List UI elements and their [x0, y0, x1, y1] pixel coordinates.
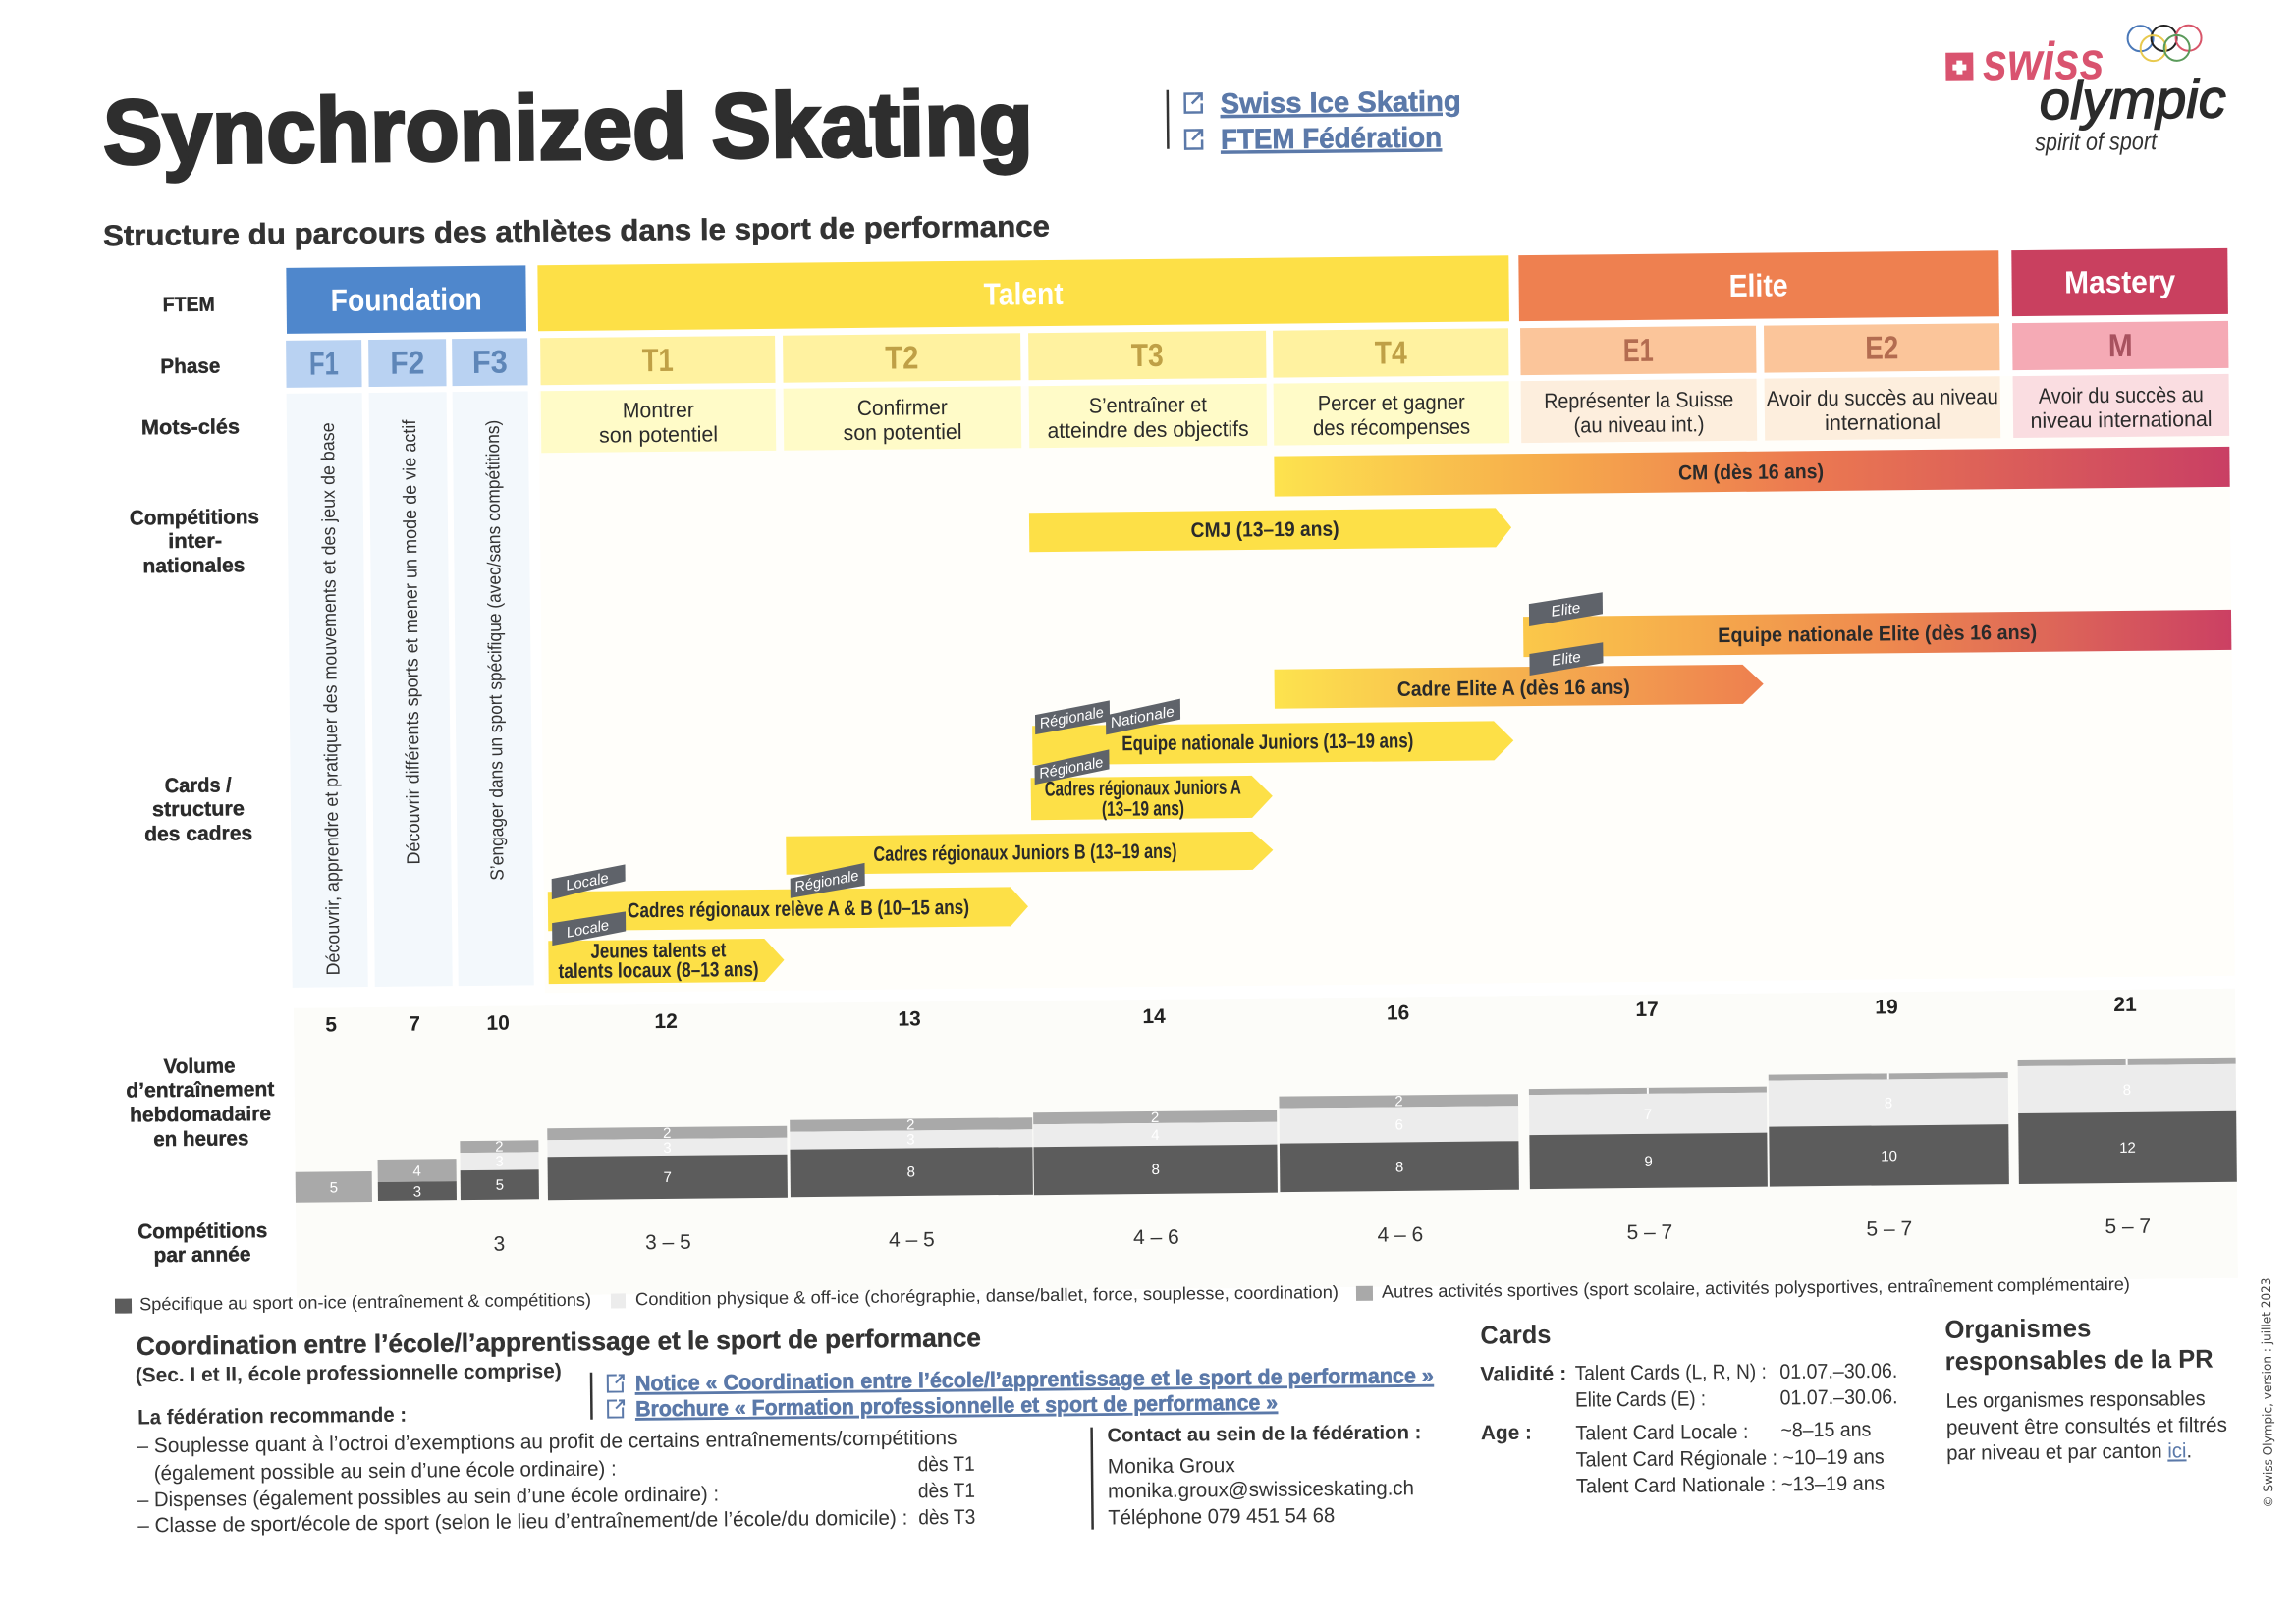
row labels: Cards / [165, 774, 232, 797]
subtitle: Structure du parcours des athlètes dans le sport de performance [103, 210, 1050, 252]
bar: E2: 10 [1881, 1148, 1897, 1164]
section: cards: Age : [1481, 1422, 1532, 1444]
keywords: Percer et gagner [1318, 390, 1465, 415]
keywords: des récompenses [1313, 414, 1470, 440]
arrow: Cadres régionaux Juniors A: (13–19 ans) [1102, 797, 1184, 821]
bar: T3 [1033, 1109, 1278, 1195]
section: responsible organisations: Organismes [1944, 1313, 2092, 1344]
icon: external link [608, 1400, 624, 1418]
bar: T4: 2 [1394, 1093, 1403, 1110]
section: responsible organisations: par niveau et par canton ici. [1946, 1439, 2192, 1465]
competitions per year: 4 – 6 [1133, 1226, 1179, 1249]
competitions per year: 4 – 5 [889, 1228, 935, 1252]
phases [286, 321, 2228, 388]
bar: F2 [378, 1159, 457, 1201]
competitions per year: 5 – 7 [1626, 1221, 1672, 1244]
competitions per year: 4 – 6 [1377, 1223, 1423, 1247]
arrow: CMJ: CMJ (13–19 ans) [1190, 518, 1339, 542]
section: cards: Talent Cards (L, R, N) : [1575, 1361, 1767, 1385]
recommendations list: – Classe de sport/école de sport (selon le lieu d’entraînement/de l’école/du domicile) : [137, 1507, 907, 1537]
recommendations list: – Souplesse quant à l’octroi d’exemptions au profit de certains entraînements/compétitions [137, 1427, 957, 1457]
totals: weekly hours: 12 [654, 1010, 678, 1033]
row labels: structure [152, 797, 245, 821]
row labels: Compétitions [130, 506, 259, 529]
recommendations list: dès T3 [918, 1506, 975, 1529]
keywords: (au niveau int.) [1573, 411, 1705, 438]
bar: T3: 8 [1151, 1162, 1160, 1178]
bar: T1: 3 [663, 1140, 672, 1157]
heading: Coordination entre l’école/l’apprentissage et le sport de performance [137, 1323, 981, 1361]
link: FTEM Fédération: FTEM Fédération [1221, 122, 1442, 156]
section: cards: Talent Card Régionale : ~10–19 ans [1576, 1445, 1885, 1472]
totals: weekly hours: 17 [1635, 999, 1659, 1021]
keywords: niveau international [2030, 406, 2213, 433]
section: cards: Validité : [1480, 1363, 1566, 1386]
header: Mastery [2011, 248, 2228, 316]
recommendations list: (également possible au sein d’une école ordinaire) : [154, 1458, 617, 1485]
bar: T3: 2 [1151, 1110, 1159, 1126]
totals: weekly hours: 19 [1875, 996, 1898, 1019]
arrow: Equipe nationale Juniors [1032, 721, 1513, 765]
keywords: international [1825, 409, 1941, 435]
keywords: Découvrir différents sports et mener un mode de vie actif [400, 419, 425, 865]
arrow: Cadres régionaux Juniors A: Cadres régionaux Juniors A [1045, 777, 1241, 801]
bar: Equipe nationale Elite [1523, 610, 2231, 657]
bar: CM: CM (dès 16 ans) [1678, 460, 1824, 485]
bar: E1: 9 [1644, 1154, 1653, 1170]
contact: monika.groux@swissiceskating.ch [1108, 1477, 1414, 1502]
FTEM headers [286, 248, 2228, 334]
row labels: d’entraînement [126, 1078, 274, 1103]
stacked bar chart: weekly training volume [295, 1058, 2237, 1203]
section: cards: Talent Card Locale : [1575, 1421, 1749, 1445]
header: Talent [537, 255, 1509, 331]
keywords: atteindre des objectifs [1047, 416, 1249, 443]
bar: T4: 8 [1395, 1159, 1403, 1175]
tag: Locale [552, 864, 626, 899]
keywords [287, 374, 2235, 988]
phases: M [2108, 327, 2133, 363]
competitions per year: 3 [493, 1233, 505, 1256]
phases: F1 [309, 345, 339, 382]
phases: T2 [885, 339, 918, 376]
bar: F3 [460, 1138, 539, 1200]
row labels [118, 293, 276, 1268]
bar: T2 [790, 1115, 1033, 1197]
row labels: Volume [163, 1055, 236, 1078]
logo: Swiss Olympic: swiss [1983, 31, 2105, 91]
bar: F3: 5 [496, 1177, 504, 1194]
bar: E1 [1529, 1087, 1768, 1189]
section: cards: 01.07.–30.06. [1779, 1360, 1897, 1383]
row labels: Compétitions [137, 1219, 267, 1243]
keywords: Représenter la Suisse [1544, 387, 1733, 413]
totals: weekly hours: 14 [1142, 1005, 1166, 1028]
section: school coordination: La fédération recommande : [137, 1404, 407, 1429]
totals: weekly hours [325, 994, 2137, 1036]
link: Notice: Notice « Coordination entre l’école/l’apprentissage et le sport de performance » [635, 1363, 1434, 1395]
section: school coordination [135, 1319, 1435, 1539]
arrow: Cadres régionaux relève [548, 887, 1028, 931]
bar: E2: 8 [1885, 1095, 1892, 1111]
tag: Locale [552, 911, 626, 946]
arrow: Cadres régionaux Juniors A [1031, 776, 1273, 822]
arrow: Cadres régionaux Juniors B: Cadres régionaux Juniors B (13–19 ans) [873, 840, 1177, 866]
totals: weekly hours: 10 [486, 1012, 510, 1035]
legend: Autres activités sportives (sport scolaire, activités polysportives, entraînement complémentaire) [1382, 1274, 2130, 1302]
totals: weekly hours: 5 [325, 1013, 337, 1036]
totals: weekly hours: 13 [898, 1007, 921, 1031]
contact: Monika Groux [1108, 1454, 1235, 1478]
row labels: nationales [142, 554, 246, 577]
arrow: Equipe nationale Juniors: Equipe nationale Juniors (13–19 ans) [1121, 730, 1413, 755]
phases: F3 [472, 344, 508, 380]
header: Talent: Talent [983, 276, 1064, 312]
bar: F2: 3 [413, 1184, 421, 1201]
bar: F3: 3 [495, 1154, 504, 1170]
recommendations list: dès T1 [918, 1480, 975, 1502]
legend: Condition physique & off-ice (chorégraphie, danse/ballet, force, souplesse, coordination) [635, 1282, 1339, 1309]
icon: external link [1185, 130, 1202, 149]
arrow: Jeunes talents: Jeunes talents et [590, 939, 727, 963]
phases: T4 [1375, 334, 1408, 371]
contact [1090, 1422, 1422, 1530]
bar: CM [1274, 447, 2230, 497]
keywords: Avoir du succès au niveau [1767, 384, 1998, 411]
icon: external link [1185, 93, 1202, 113]
legend: Spécifique au sport on-ice (entraînement & compétitions) [139, 1290, 591, 1314]
logo: Swiss Olympic: spirit of sport [2035, 128, 2158, 156]
row labels: en heures [153, 1127, 248, 1151]
phases: E2 [1865, 329, 1898, 366]
row labels: FTEM [163, 294, 215, 316]
totals: weekly hours: 16 [1387, 1001, 1409, 1025]
legend [115, 1274, 2130, 1315]
tag: Elite [1529, 592, 1603, 626]
totals: weekly hours: 7 [409, 1013, 420, 1036]
keywords: Confirmer [857, 395, 948, 420]
section: responsible organisations: responsables de la PR [1945, 1344, 2214, 1376]
bar: T1: 7 [663, 1169, 672, 1186]
section: cards: 01.07.–30.06. [1779, 1385, 1898, 1410]
bar: F3: 2 [495, 1139, 504, 1156]
bar: M [2018, 1058, 2237, 1184]
contact: Contact au sein de la fédération : [1107, 1422, 1422, 1446]
logo: Swiss Olympic: olympic [2039, 68, 2226, 131]
section: responsible organisations: peuvent être consultés et filtrés [1946, 1414, 2227, 1439]
row labels: Phase [160, 355, 220, 378]
bar: Equipe nationale Elite: Equipe nationale Elite (dès 16 ans) [1718, 622, 2037, 647]
arrow: CMJ [1029, 508, 1511, 552]
bar: M: 12 [2119, 1140, 2136, 1157]
arrow: Jeunes talents: talents locaux (8–13 ans) [558, 958, 759, 983]
keywords: Découvrir, apprendre et pratiquer des mouvements et des jeux de base [318, 422, 345, 976]
bar: M: 8 [2123, 1082, 2131, 1099]
bar: T2: 3 [906, 1131, 915, 1149]
competitions per year: 5 – 7 [1866, 1218, 1912, 1241]
bar: T4 [1279, 1092, 1519, 1192]
arrow: Cadres régionaux Juniors B [786, 832, 1274, 875]
keywords: S’entraîner et [1089, 392, 1207, 418]
row labels: des cadres [144, 822, 252, 845]
bar: T3: 4 [1151, 1127, 1160, 1144]
section: cards: Elite Cards (E) : [1575, 1387, 1706, 1412]
row labels: inter- [168, 530, 222, 553]
section: cards: ~8–15 ans [1780, 1419, 1872, 1442]
copyright: © Swiss Olympic, version : juillet 2023 [2260, 1277, 2276, 1508]
link: Swiss Ice Skating: Swiss Ice Skating [1221, 86, 1461, 120]
phases: T3 [1131, 337, 1164, 373]
link: Brochure: Brochure « Formation professionnelle et sport de performance » [635, 1390, 1278, 1421]
header: Foundation [286, 265, 526, 334]
bar: T2: 2 [906, 1116, 914, 1134]
header: Elite [1518, 250, 1999, 321]
header: Elite: Elite [1728, 267, 1788, 303]
bar: T4: 6 [1394, 1116, 1403, 1133]
section: responsible organisations [1944, 1312, 2227, 1465]
section: cards [1480, 1316, 1899, 1499]
keywords: S’engager dans un sport spécifique (avec/sans compétitions) [483, 420, 509, 881]
phases: T1 [642, 342, 674, 378]
logo: Swiss Olympic [1945, 25, 2226, 157]
keywords: Avoir du succès au [2039, 382, 2204, 408]
bar: T1: 2 [663, 1125, 672, 1142]
keywords: Montrer [623, 398, 694, 422]
section: responsible organisations: Les organismes responsables [1946, 1387, 2206, 1413]
tag: Régionale: Régionale [1038, 704, 1105, 732]
icon: external link [608, 1375, 624, 1392]
arrow: Cadre Elite A [1275, 665, 1764, 709]
tag: Elite: Elite [1550, 600, 1581, 621]
title: Synchronized Skating [102, 72, 1033, 184]
bar: T2: 8 [906, 1164, 915, 1181]
section: cards: Talent Card Nationale : ~13–19 ans [1576, 1472, 1885, 1498]
recommendations list [137, 1427, 975, 1537]
section: school coordination: (Sec. I et II, école professionnelle comprise) [136, 1360, 562, 1386]
arrow: Jeunes talents [548, 939, 785, 984]
tag: Nationale: Nationale [1109, 703, 1175, 731]
totals: weekly hours: 21 [2113, 994, 2137, 1016]
competitions per year [493, 1216, 2151, 1256]
arrow: Cadre Elite A: Cadre Elite A (dès 16 ans) [1397, 677, 1630, 701]
keywords: son potentiel [843, 419, 962, 445]
phases: E1 [1623, 332, 1654, 368]
bar: T1 [547, 1124, 788, 1200]
tag: Nationale [1106, 699, 1180, 734]
bar: F1: 5 [330, 1179, 338, 1196]
bar: E1: 7 [1644, 1107, 1652, 1123]
arrow: Cadres régionaux relève: Cadres régionaux relève A & B (10–15 ans) [628, 896, 969, 922]
row labels: hebdomadaire [130, 1103, 271, 1127]
tag: Locale: Locale [565, 870, 610, 894]
section: cards: Cards [1480, 1320, 1552, 1350]
top links [1167, 86, 1461, 156]
competitions per year: 3 – 5 [645, 1231, 691, 1254]
bar: F1 [296, 1171, 372, 1203]
tag: Régionale: Régionale [793, 867, 860, 895]
header: Foundation: Foundation [331, 281, 482, 318]
tag: Régionale: Régionale [1038, 754, 1105, 783]
competitions per year: 5 – 7 [2105, 1216, 2151, 1238]
phases: F2 [390, 344, 425, 381]
bar: E2 [1769, 1072, 2009, 1187]
tag: Elite [1529, 642, 1604, 676]
header: Mastery: Mastery [2064, 263, 2175, 300]
tag: Elite: Elite [1551, 649, 1582, 670]
contact: Téléphone 079 451 54 68 [1108, 1504, 1335, 1529]
recommendations list: dès T1 [918, 1453, 975, 1476]
tag: Locale: Locale [565, 917, 611, 942]
keywords: son potentiel [599, 421, 718, 448]
row labels: Mots-clés [141, 415, 240, 439]
recommendations list: – Dispenses (également possibles au sein d’une école ordinaire) : [137, 1483, 719, 1511]
bar: F2: 4 [412, 1164, 421, 1180]
row labels: par année [153, 1243, 251, 1267]
